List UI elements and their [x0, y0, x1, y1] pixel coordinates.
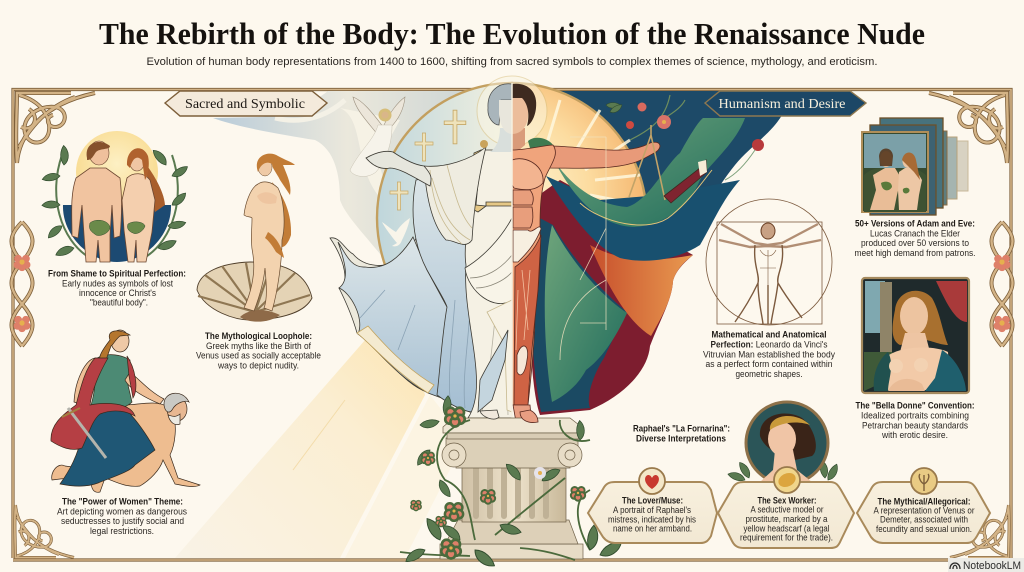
- compass and book: [629, 125, 707, 203]
- text block: Bella Donne: Idealized portraits combining: [861, 410, 969, 422]
- title: The Rebirth of the Body: The Evolution of the Renaissance Nude: [99, 16, 925, 51]
- text block: Mathematical and Anatomical Perfection: [703, 330, 835, 380]
- panel: The Sex Worker card: requirement for the trade).: [740, 532, 833, 544]
- badge: coin: [774, 467, 800, 493]
- anatomical foot: [520, 410, 538, 423]
- text block: The Mythological Loophole: [196, 331, 321, 372]
- text block: The Mythological Loophole: ways to depict nudity.: [217, 360, 299, 372]
- text block: Mathematical and Anatomical Perfection: Vitruvian Man established the body: [703, 350, 835, 360]
- light beams: [175, 300, 465, 558]
- centre divider: [511, 83, 513, 425]
- NotebookLM badge: NotebookLM: [963, 560, 1021, 572]
- statue arm: [366, 151, 431, 186]
- text block: From Shame to Spiritual Perfection: "beautiful body".: [90, 298, 148, 308]
- text block: 50+ Versions: meet high demand from patrons.: [854, 248, 976, 259]
- text block: Bella Donne: [856, 400, 974, 441]
- halo circle: right half: [512, 83, 646, 260]
- foot: statue: [480, 410, 499, 419]
- illustration: stacked Cranach panels: [862, 118, 968, 215]
- pedestal: [440, 418, 583, 559]
- panel: The Lover/Muse card: The Lover/Muse:: [622, 496, 683, 506]
- illustration: Venus on a shell: [197, 154, 312, 322]
- text block: Power of Women: Art depicting women as dangerous: [57, 506, 187, 518]
- anatomical body: [512, 142, 660, 422]
- panel: The Mythical/Allegorical card: [857, 468, 990, 543]
- text block: Power of Women: [57, 496, 187, 537]
- flowing cape: [530, 118, 745, 415]
- text block: The Mythological Loophole: Venus used as socially acceptable: [196, 350, 321, 362]
- illustration: Power of Women: [51, 330, 200, 492]
- panel: The Lover/Muse card: A portrait of Raphael's: [613, 505, 691, 516]
- navy field behind humanism side: [512, 91, 789, 290]
- text block: Mathematical and Anatomical Perfection: Perfection: Leonardo da Vinci's: [710, 340, 828, 350]
- NotebookLM badge: [948, 558, 1024, 572]
- panel: The Lover/Muse card: mistress, indicated by his: [608, 514, 696, 526]
- badge: wheat sheaf: [911, 468, 937, 494]
- panel: The Lover/Muse card: name on her armband.: [613, 524, 692, 534]
- panel: The Mythical/Allegorical card: A representation of Venus or: [874, 506, 975, 516]
- left flowing robe: [330, 170, 488, 412]
- text block: Mathematical and Anatomical Perfection: geometric shapes.: [736, 369, 802, 380]
- text block: 50+ Versions: [854, 218, 976, 259]
- illustration: Bella Donne portrait: [862, 278, 969, 393]
- text block: Power of Women: seductresses to justify social and: [61, 516, 184, 527]
- panel: The Sex Worker card: A seductive model or: [750, 504, 824, 516]
- heading: Raphael's La Fornarina: Diverse Interpretations: [636, 434, 726, 444]
- text block: From Shame to Spiritual Perfection: Early nudes as symbols of lost: [62, 278, 173, 290]
- vitruvian construction lines: [560, 137, 606, 360]
- text block: Power of Women: The "Power of Women" Theme:: [62, 496, 183, 508]
- panel: The Sex Worker card: yellow headscarf (a legal: [744, 524, 830, 534]
- panel: Sacred and Symbolic pill: Sacred and Symbolic: [185, 97, 305, 112]
- symbols: crosses and dove: [382, 110, 466, 246]
- text block: From Shame to Spiritual Perfection: From Shame to Spiritual Perfection:: [48, 268, 186, 280]
- sacred veil and angel sky: [213, 91, 512, 260]
- panel: The Mythical/Allegorical card: The Mythical/Allegorical:: [878, 496, 970, 508]
- neck and head: statue half: [477, 76, 547, 152]
- text block: 50+ Versions: Lucas Cranach the Elder: [870, 228, 961, 240]
- heading: Raphael's La Fornarina: [633, 424, 730, 444]
- subtitle: Evolution of human body representations from 1400 to 1600, shifting from sacred symbols to complex themes of science, mythology, and eroticism.: [146, 56, 878, 68]
- panel: Sacred and Symbolic pill: [165, 91, 327, 116]
- statue body and drape: [424, 147, 512, 418]
- vines and flowers: [400, 395, 623, 571]
- text block: Mathematical and Anatomical Perfection: Mathematical and Anatomical: [712, 330, 826, 340]
- medallion: La Fornarina portrait: [728, 402, 842, 485]
- text block: Bella Donne: with erotic desire.: [881, 430, 948, 441]
- halo circle: left half: [377, 83, 512, 265]
- text block: From Shame to Spiritual Perfection: [48, 268, 186, 308]
- panel: Humanism and Desire pill: [705, 91, 866, 116]
- text block: Mathematical and Anatomical Perfection: as a perfect form contained within: [706, 359, 832, 370]
- panel: Humanism and Desire pill: Humanism and Desire: [718, 97, 846, 112]
- panel: The Lover/Muse card: [588, 468, 717, 543]
- text block: Power of Women: legal restrictions.: [90, 526, 154, 537]
- text block: 50+ Versions: produced over 50 versions to: [861, 238, 969, 249]
- illustration: Vitruvian Man: [706, 199, 832, 325]
- panel: The Mythical/Allegorical card: Demeter, associated with: [880, 514, 968, 526]
- compass-side floral decor: [606, 95, 764, 180]
- heading: Raphael's La Fornarina: Raphael's "La Fornarina":: [633, 424, 730, 434]
- neck and head: anatomical half: [512, 84, 553, 156]
- text block: Bella Donne: The "Bella Donne" Convention:: [856, 400, 974, 412]
- panel: The Sex Worker card: [718, 467, 854, 548]
- text block: From Shame to Spiritual Perfection: innocence or Christ's: [79, 288, 156, 299]
- text block: The Mythological Loophole: The Mythological Loophole:: [205, 331, 312, 342]
- illustration: Adam and Eve medallion: [42, 131, 189, 262]
- text block: 50+ Versions: 50+ Versions of Adam and Eve:: [855, 218, 975, 230]
- text block: The Mythological Loophole: Greek myths like the Birth of: [206, 341, 311, 352]
- panel: The Mythical/Allegorical card: fecundity and sexual union.: [876, 524, 972, 535]
- text block: Bella Donne: Petrarchan beauty standards: [862, 420, 968, 432]
- panel: The Sex Worker card: The Sex Worker:: [758, 496, 816, 506]
- panel: The Sex Worker card: prostitute, marked by a: [746, 514, 828, 525]
- sun rays: [545, 100, 640, 205]
- angel: [350, 97, 405, 176]
- badge: heart: [639, 468, 665, 494]
